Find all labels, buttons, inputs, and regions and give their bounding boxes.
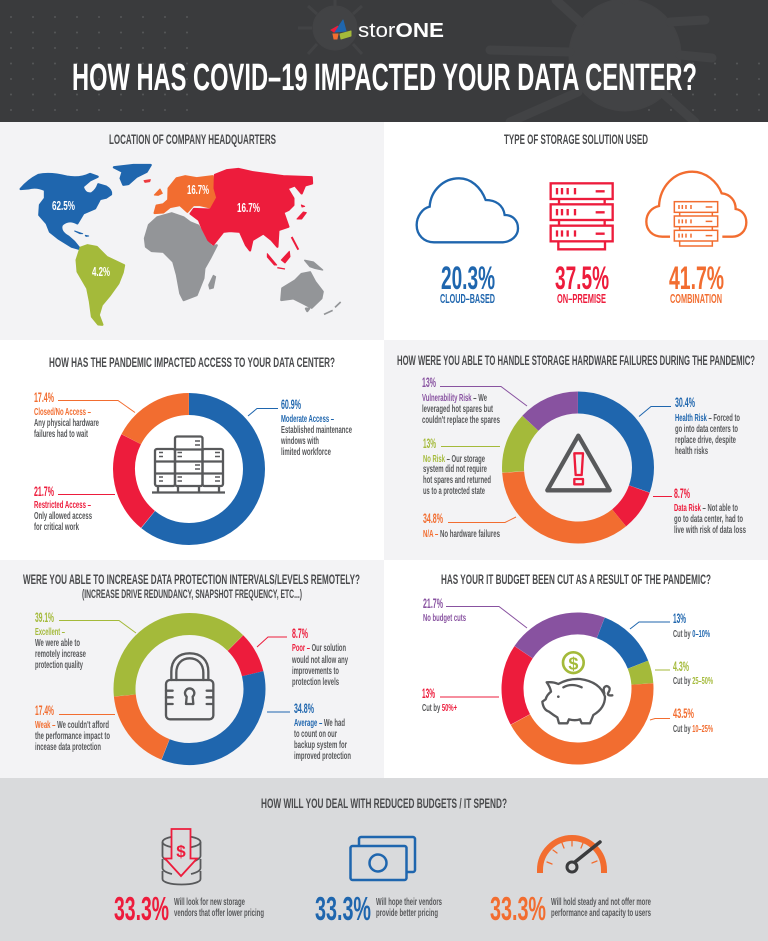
callout: no risk: 13%	[423, 436, 436, 451]
callout: closed/no access: failures had to wait	[34, 429, 88, 440]
subheading: (INCREASE DRIVE REDUNDANCY, SNAPSHOT FREQUENCY, ETC...)	[82, 587, 302, 601]
callout: n/a	[423, 511, 516, 540]
panel: hardware failures	[384, 340, 768, 560]
callout: excellent: protection quality	[35, 660, 83, 671]
callout: n/a: N/A – No hardware failures	[423, 529, 500, 540]
callout: excellent: 39.1%	[35, 610, 54, 625]
panel: IT budget cuts	[384, 560, 768, 779]
callout: restricted access	[34, 484, 115, 533]
callout: closed/no access: 17.4%	[34, 390, 54, 405]
heading: HOW WILL YOU DEAL WITH REDUCED BUDGETS / IT SPEND?	[261, 796, 507, 811]
callout: cut by 10-25%: Cut by 10–25%	[673, 724, 713, 735]
callout: vulnerability risk: couldn't replace the spares	[422, 415, 500, 426]
callout: no risk: hot spares and returned	[423, 475, 491, 486]
map labels: 16.7%	[237, 200, 260, 215]
callout: excellent: remotely increase	[35, 649, 86, 660]
callout: poor: 8.7%	[292, 626, 308, 641]
map labels: 16.7%	[187, 182, 209, 197]
callout: health risk	[639, 395, 740, 457]
callout: no budget cuts: 21.7%	[423, 596, 443, 611]
callout: closed/no access: Any physical hardware	[34, 418, 99, 429]
callout: no risk: us to a protected state	[423, 486, 485, 497]
callout: n/a: 34.8%	[423, 511, 443, 526]
stat: better pricing: provide better pricing	[376, 908, 438, 919]
callout: restricted access: for critical work	[34, 522, 79, 533]
callout: health risk: 30.4%	[675, 395, 695, 410]
callout: weak	[35, 703, 115, 753]
callout: cut by 50%+: 13%	[422, 686, 435, 701]
callout: cut by 25-50%: Cut by 25–50%	[673, 676, 713, 687]
callout: closed/no access	[34, 390, 135, 440]
callout: average: backup system for	[294, 740, 347, 751]
stat: combination: 41.7%	[669, 260, 724, 296]
callout: cut by 0-10%: Cut by 0–10%	[673, 629, 710, 640]
stat: better pricing: Will hope their vendors	[376, 897, 442, 908]
callout: cut by 10-25%: 43.5%	[673, 706, 694, 721]
stat: cloud-based: CLOUD–BASED	[440, 291, 495, 306]
donut chart: budget	[487, 598, 668, 779]
donut chart: hardware failures	[486, 376, 670, 559]
callout: cut by 25-50%	[655, 659, 713, 687]
stat: on-premise	[555, 260, 609, 306]
icon: database with down arrow	[162, 829, 200, 884]
world map	[21, 165, 341, 325]
icon: money bills	[350, 837, 415, 880]
heading: HOW HAS THE PANDEMIC IMPACTED ACCESS TO YOUR DATA CENTER?	[49, 355, 335, 370]
map labels: 4.2%	[92, 264, 110, 279]
callout: poor: would not allow any	[291, 655, 348, 666]
callout: moderate access: windows with	[280, 436, 319, 447]
panel: dealing with reduced budgets	[0, 778, 768, 941]
callout: weak: the performance impact to	[35, 731, 110, 742]
panel: data protection	[0, 560, 384, 781]
icon: cloud and server combination	[646, 172, 746, 246]
callout: restricted access: 21.7%	[34, 484, 54, 499]
callout: no budget cuts	[423, 596, 527, 628]
stat: hold steady	[490, 890, 651, 927]
callout: excellent	[35, 610, 136, 671]
callout: moderate access: 60.9%	[281, 397, 301, 412]
callout: cut by 0-10%: 13%	[673, 611, 686, 626]
stat: new vendors: vendors that offer lower pricing	[174, 908, 264, 919]
callout: data risk	[653, 486, 746, 536]
icon: padlock	[166, 653, 213, 719]
callout: weak: 17.4%	[35, 703, 54, 718]
heading: LOCATION OF COMPANY HEADQUARTERS	[109, 132, 276, 147]
callout: cut by 0-10%	[630, 611, 710, 640]
callout: health risk: Health Risk – Forced to	[675, 413, 740, 424]
callout: excellent: Excellent –	[35, 627, 65, 638]
callout: weak: Weak – We couldn't afford	[35, 720, 109, 731]
callout: average: improved protection	[294, 751, 351, 762]
callout: restricted access: Restricted Access –	[34, 500, 91, 511]
panel: location of company headquarters	[0, 122, 384, 340]
panel: access to data center	[0, 340, 384, 560]
heading: TYPE OF STORAGE SOLUTION USED	[504, 132, 648, 147]
callout: vulnerability risk: 13%	[422, 375, 436, 390]
callout: moderate access	[248, 397, 352, 458]
callout: vulnerability risk	[422, 375, 527, 426]
callout: poor: improvements to	[292, 666, 339, 677]
callout: data risk: Data Risk – Not able to	[674, 503, 738, 514]
callout: restricted access: Only allowed access	[34, 511, 92, 522]
callout: excellent: We were able to	[35, 638, 80, 649]
callout: moderate access: limited workforce	[281, 447, 331, 458]
callout: average: Average – We had	[294, 718, 345, 729]
icon: piggy bank with coin: $	[568, 653, 578, 673]
icon: cloud	[417, 178, 518, 242]
callout: average: to count on our	[294, 729, 337, 740]
icon: server rack	[551, 183, 613, 249]
icon: speedometer	[540, 838, 604, 873]
callout: poor: Poor – Our solution	[292, 643, 346, 654]
callout: no risk: system did not require	[423, 464, 487, 475]
callout: vulnerability risk: leveraged hot spares but	[422, 404, 493, 415]
map labels	[52, 182, 260, 279]
icon: warning triangle	[547, 436, 610, 490]
icon: servers	[152, 436, 225, 492]
donut chart: access	[98, 378, 280, 560]
stat: new vendors	[114, 890, 264, 927]
logo: storONE	[358, 20, 444, 42]
stat: cloud-based: 20.3%	[441, 260, 495, 296]
callout: closed/no access: Closed/No Access –	[34, 407, 91, 418]
map labels: 62.5%	[52, 198, 75, 213]
callout: average	[267, 701, 351, 762]
icon: piggy bank with coin	[542, 652, 612, 723]
callout: data risk: 8.7%	[674, 486, 690, 501]
callout: no risk	[423, 436, 500, 497]
callout: cut by 10-25%	[650, 706, 713, 735]
callout: moderate access: Moderate Access –	[281, 414, 334, 425]
donut chart: data protection	[98, 597, 281, 781]
callout: moderate access: Established maintenance	[281, 425, 352, 436]
callout: vulnerability risk: Vulnerability Risk – We	[422, 393, 487, 404]
callout: poor	[257, 626, 348, 688]
stat: on-premise: 37.5%	[555, 260, 609, 296]
callout: average: 34.8%	[294, 701, 314, 716]
header banner	[0, 0, 768, 122]
callout: health risk: health risks	[675, 446, 708, 457]
icon: database with down arrow: $	[176, 842, 186, 861]
callout: cut by 25-50%: 4.3%	[673, 659, 689, 674]
stat: better pricing: 33.3%	[315, 890, 371, 927]
callout: weak: incease data protection	[35, 742, 101, 753]
panel: type of storage solution	[384, 122, 768, 340]
callout: poor: protection levels	[292, 677, 339, 688]
callout: cut by 50%+: Cut by 50%+	[422, 703, 457, 714]
stat: combination: COMBINATION	[670, 291, 722, 306]
stat: hold steady: 33.3%	[490, 890, 546, 927]
heading: WERE YOU ABLE TO INCREASE DATA PROTECTION INTERVALS/LEVELS REMOTELY?	[23, 572, 360, 587]
callout: no budget cuts: No budget cuts	[423, 613, 466, 624]
callout: cut by 50%+	[422, 686, 499, 714]
stat: on-premise: ON–PREMISE	[557, 291, 606, 306]
stat: new vendors: 33.3%	[114, 890, 169, 927]
stat: combination	[669, 260, 724, 306]
stat: hold steady: Will hold steady and not offer more	[551, 897, 651, 908]
stat: cloud-based	[440, 260, 495, 306]
stat: hold steady: performance and capacity to users	[551, 908, 651, 919]
stat: new vendors: Will look for new storage	[174, 897, 245, 908]
callout: no risk: No Risk – Our storage	[423, 454, 485, 465]
